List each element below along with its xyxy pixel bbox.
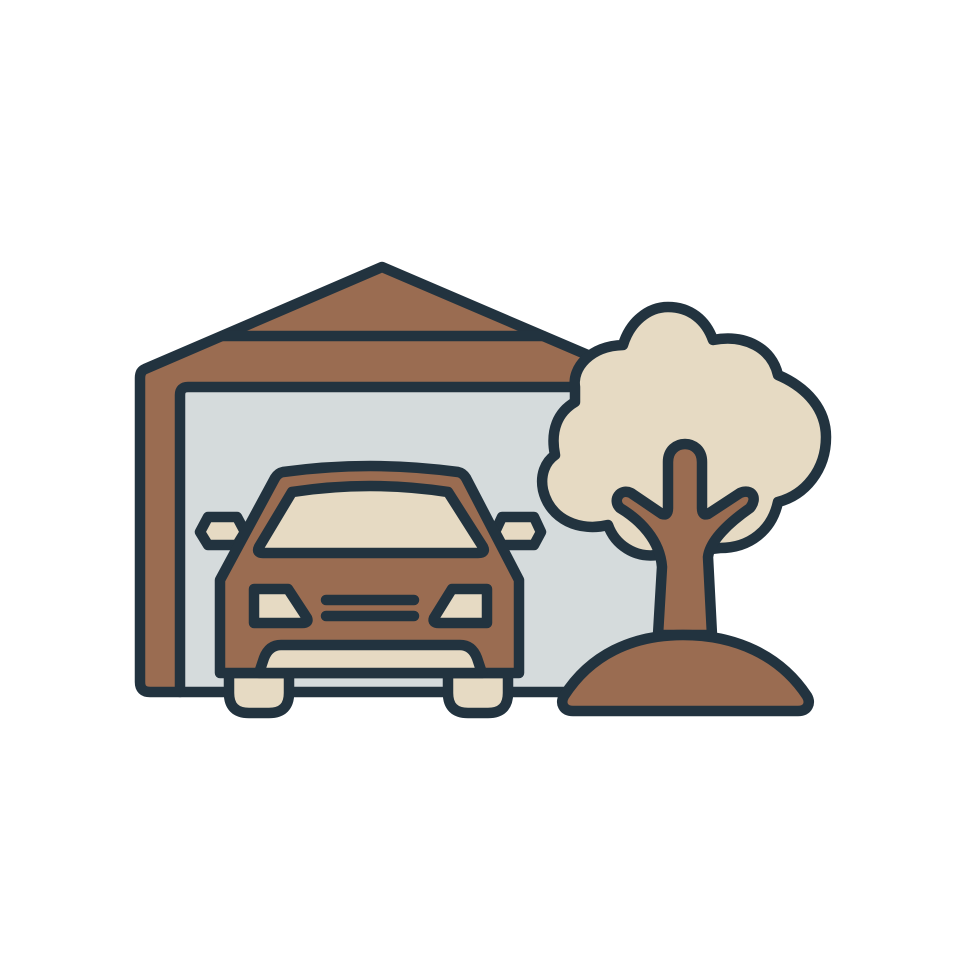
windshield	[258, 486, 484, 553]
tree canopy	[542, 307, 826, 555]
mound	[562, 635, 809, 711]
tree trunk	[617, 444, 754, 635]
car body	[220, 466, 519, 673]
tree	[542, 307, 826, 711]
left headlight	[254, 589, 307, 623]
right wheel	[448, 673, 508, 713]
garage door frame	[180, 387, 590, 692]
car	[200, 466, 541, 713]
grille	[326, 600, 414, 616]
bumper	[259, 645, 482, 673]
right mirror	[495, 517, 541, 545]
right headlight	[434, 589, 487, 623]
garage door panel	[180, 387, 662, 692]
left mirror	[200, 517, 245, 545]
roof beam	[223, 331, 543, 341]
garage	[140, 267, 662, 692]
garage wall and roof fill	[140, 267, 590, 692]
garage outline	[140, 267, 590, 692]
left wheel	[229, 673, 289, 713]
